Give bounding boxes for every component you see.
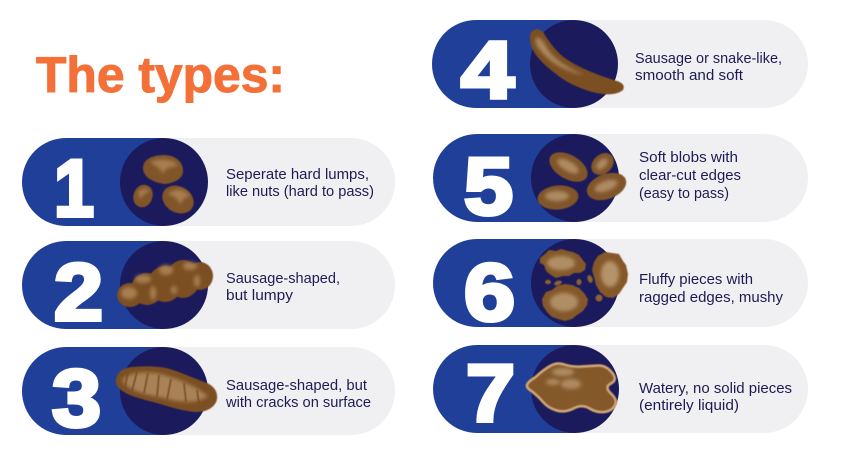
- number 5: 5: [464, 142, 513, 232]
- description: Watery, no solid pieces: [639, 380, 792, 397]
- description: ragged edges, mushy: [639, 289, 783, 306]
- description: Soft blobs with: [639, 149, 738, 166]
- pill background: [433, 134, 808, 222]
- panel: type 3: [22, 347, 395, 444]
- description: Sausage-shaped,: [226, 270, 340, 287]
- navy circle: [530, 20, 618, 108]
- panel: type 7: [433, 345, 808, 439]
- number 7: 7: [466, 349, 515, 439]
- pill background: [433, 345, 808, 433]
- icon: soft blobs: [537, 146, 630, 211]
- description: but lumpy: [226, 287, 293, 304]
- description: [639, 380, 792, 414]
- navy circle: [120, 241, 208, 329]
- icon: fluffy pieces: [540, 249, 628, 321]
- blue number section: [433, 239, 575, 327]
- description: (easy to pass): [639, 185, 729, 202]
- description: [639, 271, 783, 306]
- navy circle: [120, 138, 208, 226]
- pill background: [432, 20, 808, 108]
- navy circle: [531, 345, 619, 433]
- description: like nuts (hard to pass): [226, 183, 374, 200]
- navy circle: [120, 347, 208, 435]
- blue number section: [22, 241, 164, 329]
- panel: type 1: [22, 138, 395, 234]
- icon: lumpy sausage: [117, 260, 213, 307]
- description: Seperate hard lumps,: [226, 166, 369, 183]
- blue number section: [432, 20, 574, 108]
- number 6: 6: [464, 248, 515, 338]
- number 4: 4: [461, 26, 514, 116]
- description: Sausage-shaped, but: [226, 377, 368, 394]
- description: (entirely liquid): [639, 397, 739, 414]
- blue number section: [433, 134, 575, 222]
- blue number section: [22, 347, 164, 435]
- blue number section: [22, 138, 164, 226]
- number 2: 2: [54, 248, 103, 338]
- title: The types:: [36, 47, 285, 103]
- description: Sausage or snake-like,: [635, 50, 782, 67]
- number 3: 3: [52, 354, 101, 444]
- icon: watery puddle: [527, 364, 616, 412]
- pill background: [22, 138, 395, 226]
- pill background: [22, 347, 395, 435]
- panel: type 6: [433, 239, 808, 338]
- icon: smooth snake: [530, 29, 624, 94]
- icon: cracked sausage: [116, 366, 217, 412]
- description: clear-cut edges: [639, 167, 741, 184]
- description: Fluffy pieces with: [639, 271, 753, 288]
- description: with cracks on surface: [225, 394, 371, 411]
- description: smooth and soft: [635, 67, 744, 84]
- description: [639, 149, 741, 202]
- pill background: [433, 239, 808, 327]
- icon: three hard lumps: [130, 155, 199, 219]
- number 1: 1: [54, 144, 94, 234]
- blue number section: [433, 345, 575, 433]
- pill background: [22, 241, 395, 329]
- description: [225, 377, 371, 411]
- description: [226, 166, 374, 200]
- description: [226, 270, 340, 304]
- navy circle: [531, 134, 619, 222]
- description: [635, 50, 782, 84]
- panel: type 4: [432, 20, 808, 116]
- panel: type 5: [433, 134, 808, 232]
- panel: type 2: [22, 241, 395, 338]
- navy circle: [531, 239, 619, 327]
